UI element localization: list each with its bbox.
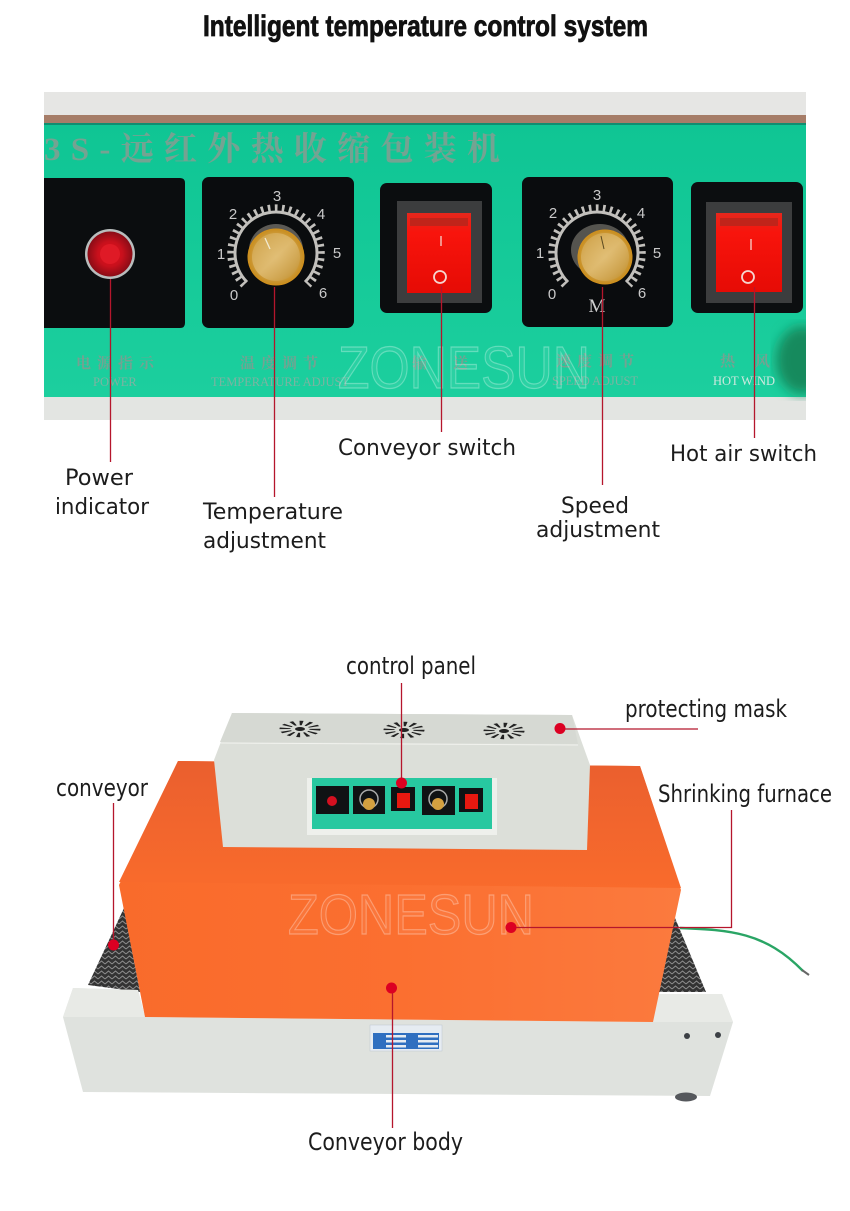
orange shrinking furnace body: [119, 761, 681, 1022]
label: temperature adjustment: adjustment: [203, 528, 326, 554]
panel captions: POWER: [93, 375, 137, 389]
speed adjustment dial: 0: [548, 286, 556, 303]
temperature adjustment dial: 3: [273, 188, 281, 205]
label: conveyor switch: Conveyor switch: [338, 435, 516, 461]
label: temperature adjustment: [202, 499, 343, 554]
label: speed adjustment: Speed: [561, 493, 629, 519]
speed adjustment dial: 3: [593, 187, 601, 204]
title: Intelligent temperature control system: [203, 10, 648, 43]
label: speed adjustment: adjustment: [536, 517, 660, 543]
label: hot air switch: Hot air switch: [670, 441, 817, 467]
speed adjustment dial: 4: [637, 205, 645, 222]
label: temperature adjustment: Temperature: [202, 499, 343, 525]
speed adjustment dial: [522, 177, 673, 327]
speed adjustment dial: 6: [638, 285, 646, 302]
callout: shrinking furnace: [506, 780, 832, 933]
vents: [285, 723, 519, 737]
conveyor mesh right: [656, 918, 706, 992]
callout: conveyor body: [308, 982, 463, 1156]
callout: control panel: control panel: [346, 652, 476, 680]
panel captions: HOT WIND: [713, 374, 775, 388]
leader: hot air switch: [754, 287, 756, 438]
leader: temperature adjustment: [274, 287, 276, 497]
callout: conveyor body: Conveyor body: [308, 1128, 463, 1156]
callout: conveyor: [56, 774, 148, 950]
panel captions: SPEED ADJUST: [552, 374, 638, 388]
conveyor switch: [380, 183, 492, 313]
panel captions: 速度调节: [556, 352, 634, 370]
panel captions: TEMPERATURE ADJUST: [211, 375, 349, 389]
label: speed adjustment: [536, 493, 660, 543]
hot air switch: [691, 182, 803, 313]
speed adjustment dial: 5: [653, 245, 661, 262]
temperature adjustment dial: 6: [319, 285, 327, 302]
callout: control panel: [346, 652, 476, 788]
label: power indicator: indicator: [55, 494, 150, 520]
watermark: ZONESUN: [288, 883, 534, 947]
panel captions: 电源指示: [76, 354, 155, 372]
callout: conveyor: conveyor: [56, 774, 148, 802]
leader: speed adjustment: [602, 287, 604, 485]
machine name printed on panel: 3S-远红外热收缩包装机: [44, 131, 500, 168]
temperature adjustment dial: 5: [333, 245, 341, 262]
nameplate: [370, 1025, 442, 1051]
temperature adjustment dial: 4: [317, 206, 325, 223]
temperature adjustment dial: 0: [230, 287, 238, 304]
temperature adjustment dial: [202, 177, 354, 328]
panel captions: 热风: [720, 352, 770, 370]
protecting mask housing: [214, 713, 590, 850]
label: power indicator: [55, 465, 150, 520]
panel captions: 输送: [412, 354, 468, 372]
callout: protecting mask: protecting mask: [625, 695, 787, 723]
machine: shrink wrap tunnel photo: [63, 713, 809, 1102]
green wire: [680, 928, 809, 975]
leader: power indicator: [110, 279, 112, 462]
miniature control panel: [307, 778, 497, 835]
label: power indicator: Power: [65, 465, 134, 491]
conveyor mesh left: [88, 908, 140, 992]
panel captions: 温度调节: [240, 354, 318, 372]
callout: protecting mask: [554, 695, 787, 734]
temperature adjustment dial: 1: [217, 246, 225, 263]
panel: control panel close-up photo: [44, 92, 850, 422]
speed adjustment dial: 2: [549, 205, 557, 222]
panel captions: [76, 352, 775, 389]
speed adjustment dial: 1: [536, 245, 544, 262]
temperature adjustment dial: 2: [229, 206, 237, 223]
base: [63, 988, 733, 1102]
watermark: ZONESUN: [338, 335, 590, 401]
speed adjustment dial: M: [589, 296, 606, 317]
leader: conveyor switch: [440, 286, 442, 432]
power indicator module: [44, 178, 185, 328]
